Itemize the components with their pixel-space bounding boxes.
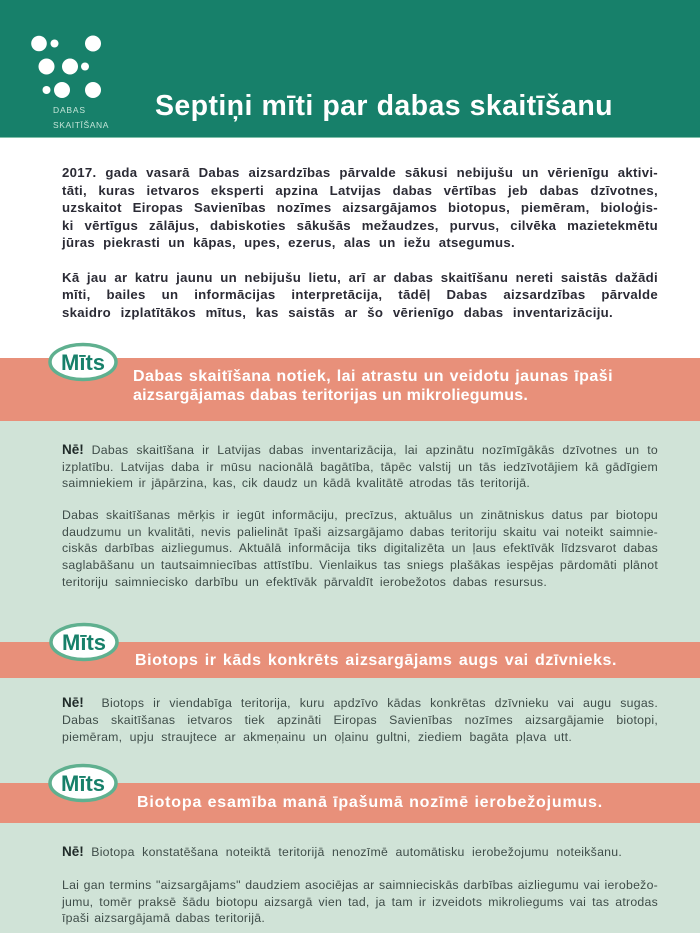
- answer text 2: Nē! Biotops ir viendabīga teritorija, kuru apdzīvo kādas konkrētas dzīvnieku vai augu sugas.: [62, 695, 658, 710]
- badge: Mīts 3: [48, 764, 118, 802]
- answer text 1: ciskās darbības aizliegumus. Aktuālā informācija tiks digitalizēta un ļaus efektīvāk līdzsvarot dabas: [62, 541, 658, 555]
- intro text: Kā jau ar katru jaunu un nebijušu lietu, arī ar dabas skaitīšanu nereti saistās dažādi: [62, 270, 658, 285]
- title: Septiņi mīti par dabas skaitīšanu: [155, 90, 613, 122]
- answer text 3: īpaši aizsargājamā dabas teritorijā.: [62, 911, 265, 925]
- header banner: [0, 0, 700, 138]
- badge: Mīts 3: Mīts: [61, 771, 105, 796]
- answer text 1: [62, 442, 658, 589]
- badge: Mīts 2: [49, 622, 119, 662]
- badge: Mīts 1: [48, 342, 118, 382]
- myth band 2: [0, 642, 700, 678]
- answer text 1: daudzumu un kvalitāti, nevis palielināt īpaši aizsargājamo dabas teritoriju skaitu vai noteikt saimnie-: [62, 525, 658, 539]
- answer text 2: Dabas skaitīšanas ietvaros tiek apzināti Eiropas Savienības nozīmes aizsargājamie biotopi,: [62, 713, 658, 727]
- intro text: uzskaitot Eiropas Savienības nozīmes aizsargājamos biotopus, piemēram, bioloģis-: [62, 200, 658, 215]
- answer text 3: [62, 844, 658, 925]
- badge: Mīts 1: Mīts: [61, 350, 105, 375]
- myth band 3: [0, 783, 700, 823]
- answer text 2: [62, 695, 658, 744]
- intro text: [62, 165, 658, 320]
- intro text: jūras piekrasti un kāpas, upes, ezerus, alas un iežu atsegumus.: [62, 235, 515, 250]
- answer text 2: piemēram, upju straujtece ar akmeņainu un oļainu gultni, ziediem bagāta pļava utt.: [62, 730, 572, 744]
- answer text 1: teritoriju saimniecisko darbību un efektīvāk pārvaldīt ierobežotos dabas resursus.: [62, 575, 547, 589]
- logo: dabas skaitīšana: SKAITĪŠANA: [53, 120, 109, 130]
- intro text: tāti, kuras ietvaros eksperti apzina Latvijas dabas vērtības jeb dabas dzīvotnes,: [62, 183, 658, 198]
- intro text: mīti, bailes un informācijas interpretācija, tādēļ Dabas aizsardzības pārvalde: [62, 287, 658, 302]
- answer text 1: saglabāšanu un tautsaimniecības attīstību. Vienlaikus tas sniegs plašākas iespējas pārdomāti plānot: [62, 558, 658, 572]
- answer text 1: Nē! Dabas skaitīšana ir Latvijas dabas inventarizācija, lai apzinātu nozīmīgākās dzīvotnes un to: [62, 442, 658, 457]
- answer text 3: jumu, tomēr praksē šādu biotopu aizsargā vien tad, ja tam ir izveidots mikroliegums vai tas atrodas: [62, 895, 658, 909]
- answer text 3: Nē! Biotopa konstatēšana noteiktā teritorijā nenozīmē automātisku ierobežojumu noteikšanu.: [62, 844, 622, 859]
- intro text: 2017. gada vasarā Dabas aizsardzības pārvalde sākusi nebijušu un vērienīgu aktivi-: [62, 165, 658, 180]
- answer text 1: izplatību. Latvijas daba ir mūsu nacionālā bagātība, tāpēc valstij un tās iedzīvotājiem kā gādīgiem: [62, 460, 658, 474]
- myth statement 1: aizsargājamas dabas teritorijas un mikroliegumus.: [133, 387, 528, 404]
- intro text: ki vērtīgus zālājus, dabiskoties sākušās mežaudzes, purvus, cilvēka mazietekmētu: [62, 218, 658, 233]
- answer text 1: saimniekiem ir jāpārzina, kas, cik daudz un kādā kvalitātē atrodas tās teritorijā.: [62, 476, 530, 490]
- green content background: [0, 421, 700, 933]
- logo: dabas skaitīšana: [31, 36, 109, 130]
- myth band 1: [0, 358, 700, 421]
- myth statement 3: Biotopa esamība manā īpašumā nozīmē ierobežojumus.: [137, 794, 603, 811]
- myth statement 1: [133, 368, 613, 404]
- answer text 3: Lai gan termins "aizsargājams" daudziem asociējas ar saimnieciskās darbības aizliegumu vai ierobežo-: [62, 878, 658, 892]
- logo: dabas skaitīšana: DABAS: [53, 105, 86, 115]
- myth statement 2: Biotops ir kāds konkrēts aizsargājams augs vai dzīvnieks.: [135, 652, 617, 669]
- intro text: skaidro izplatītākos mītus, kas saistās ar šo vērienīgo dabas inventarizāciju.: [62, 305, 613, 320]
- answer text 1: Dabas skaitīšanas mērķis ir iegūt informāciju, precīzus, aktuālus un zinātniskus datus par biotopu: [62, 508, 658, 522]
- myth statement 1: Dabas skaitīšana notiek, lai atrastu un veidotu jaunas īpaši: [133, 368, 613, 385]
- badge: Mīts 2: Mīts: [62, 630, 106, 655]
